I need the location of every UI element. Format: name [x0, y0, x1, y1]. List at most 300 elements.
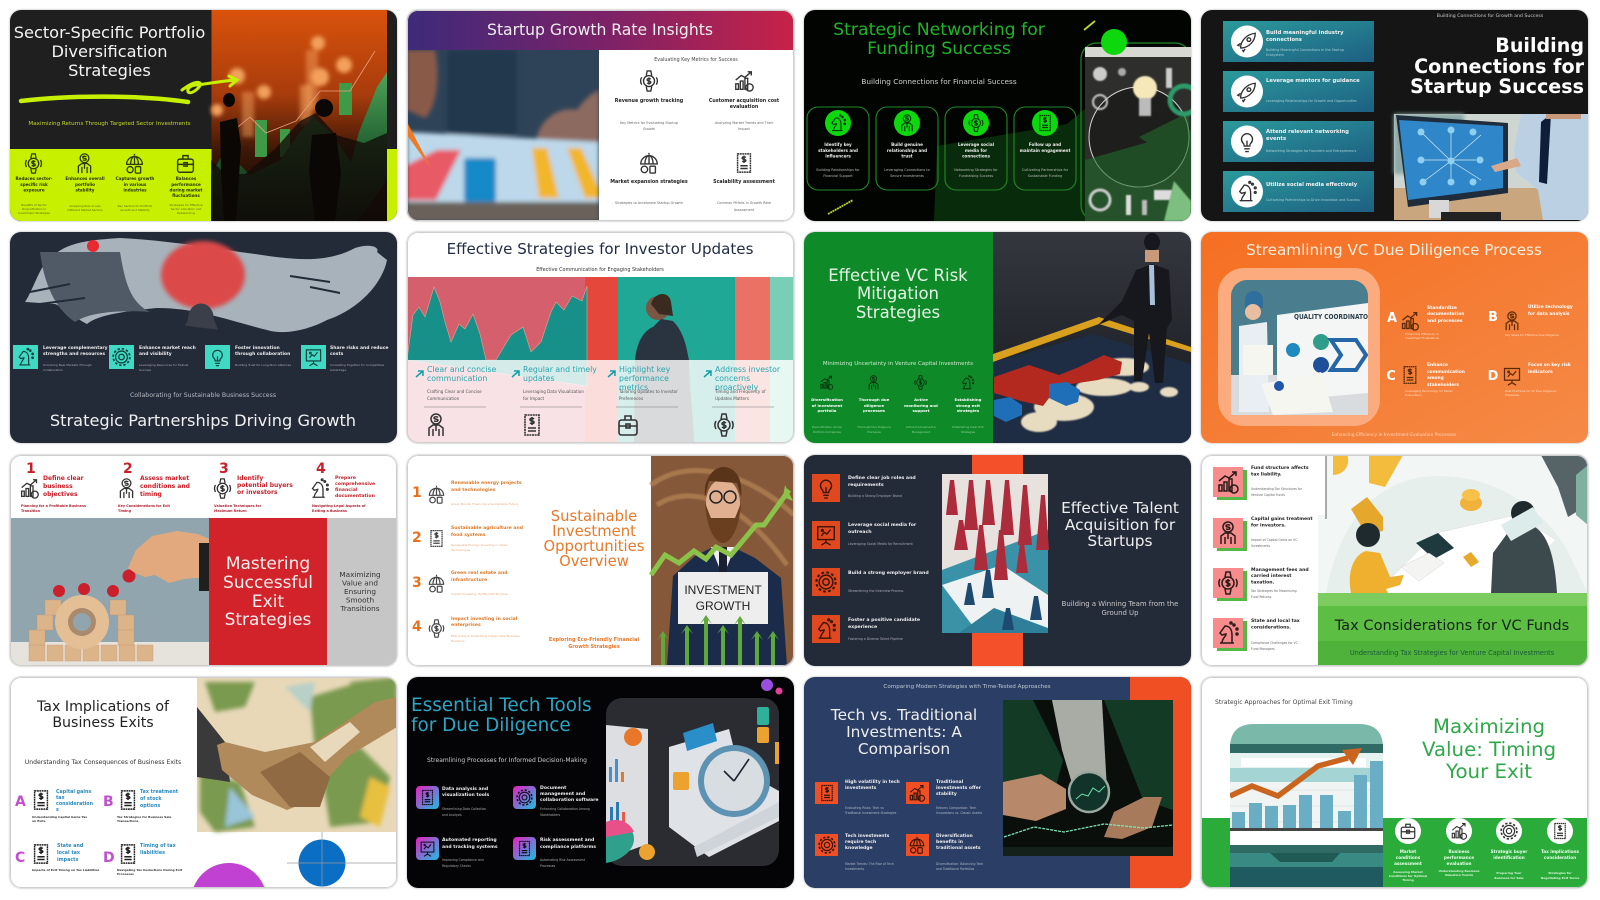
title	[830, 706, 977, 758]
list: four comparison points	[815, 779, 983, 871]
cards: four networking steps: Secure Investments	[890, 174, 924, 178]
list: four tax items	[15, 789, 183, 876]
list: four comparison points: High volatility in tech	[845, 779, 900, 785]
list: four comparison points: Market Trends: The Rise of Tech	[845, 862, 894, 866]
list: four tax points: Management fees and	[1251, 567, 1309, 573]
title: Startup Success	[1410, 75, 1584, 98]
item A	[1387, 305, 1464, 340]
green band	[1201, 818, 1588, 888]
list: four tax points: Fund Managers	[1251, 647, 1275, 651]
overlay with four tips: communication	[427, 374, 487, 383]
photo: hand placing pin on wooden blocks	[10, 518, 209, 666]
list: four tax items: impacts	[57, 857, 78, 863]
overlay with four tips	[407, 360, 794, 443]
list: four tax items: Tax Strategies for Business Sale	[117, 815, 171, 819]
title	[828, 266, 968, 322]
list: four comparison points: require tech	[845, 839, 876, 845]
list: four mitigations: Active	[914, 397, 928, 402]
list: four partnership benefits: Collaboration	[43, 368, 63, 372]
list: four partnership benefits: Foster innovation	[235, 345, 280, 351]
list: four comparison points: traditional assets	[936, 845, 981, 851]
metric grid	[610, 71, 780, 212]
list: four tax points: for investors.	[1251, 522, 1286, 528]
image: brushed banner with red glow	[25, 238, 387, 344]
list: four tax items: tax	[56, 795, 66, 801]
list: four connection tips: Leveraging Relationships for Growth and Opportunities	[1266, 99, 1357, 103]
list: four mitigations: of investment	[812, 403, 842, 408]
metric grid: Market expansion strategies	[610, 179, 688, 185]
item A: A	[1387, 311, 1397, 326]
list: four tax items: s	[56, 808, 59, 813]
list: four opportunities: ESG Criteria: Evaluating Sustainable Business	[451, 634, 520, 638]
list: four tools: Streamlining Data Collection	[442, 807, 486, 811]
photo: bearded man with investment growth sign: INVESTMENT	[684, 583, 762, 597]
list: four comparison points: knowledge	[845, 845, 873, 851]
list: four tax items: Timing of tax	[140, 843, 177, 849]
list: four mitigations: strong exit	[956, 403, 980, 408]
list: four benefits: Growth and Stability	[120, 208, 150, 212]
cards: four networking steps: Leveraging Connections to	[884, 168, 930, 172]
list: four tax items: Understanding Capital Gains Tax	[32, 815, 87, 819]
subtitle: Collaborating for Sustainable Business Success	[130, 392, 276, 399]
title: Building	[1495, 34, 1584, 57]
steps row: Assess market	[140, 475, 189, 482]
list: four partnership benefits: Success	[139, 368, 152, 372]
list: four benefits: performance	[171, 182, 201, 187]
title: Funding Success	[867, 39, 1011, 59]
list: four opportunities: infrastructure	[451, 577, 487, 583]
panel: Effective Strategies for Investor Updates	[407, 232, 794, 443]
list: four tools: Stakeholders	[540, 813, 561, 817]
list: four benefits: portfolio	[75, 182, 95, 187]
item C: Enhance	[1427, 362, 1448, 368]
list: four opportunities: Renewable energy projects	[451, 480, 522, 486]
list: four exit factors: conditions	[1396, 855, 1421, 860]
list: four benefits: Rebalancing	[177, 211, 195, 215]
subtitle: Exploring Eco-Friendly Financial	[549, 637, 639, 643]
title: Startups	[1087, 532, 1153, 550]
list: four tax items: on Exits	[32, 819, 46, 823]
overlay with four tips: Updates Matters	[715, 396, 749, 401]
list: four connection tips: Leverage mentors for guidance	[1266, 78, 1360, 84]
title	[1061, 499, 1179, 550]
list: four partnership benefits: and visibility	[139, 351, 172, 357]
list: four opportunities: 3	[412, 575, 422, 591]
title: Maximizing	[1433, 715, 1545, 738]
list: four mitigations: strategies	[957, 408, 980, 413]
steps row: comprehensive	[335, 481, 375, 487]
panel: Tax Considerations for VC Funds	[1201, 455, 1588, 666]
list: four tax items: of stock	[140, 796, 162, 802]
list: four opportunities: 4	[412, 619, 422, 635]
list: four talent steps: experience	[848, 624, 877, 630]
metric grid: Common Pitfalls in Growth Rate	[717, 201, 771, 205]
list: four tax points: Impact of Capital Gains on VC	[1251, 538, 1297, 542]
list: four tools: Processes	[540, 864, 556, 868]
list: four partnership benefits: Share risks and reduce	[330, 345, 388, 351]
metric grid: Strategies to Accelerate Startup Growth	[615, 201, 683, 205]
photo: man pointing at network diagram monitor	[1394, 114, 1588, 220]
overlay with four tips: proactively	[715, 383, 759, 392]
list: four talent steps: Leveraging Social Media for Recruitment	[848, 542, 914, 546]
list: four connection tips: Build meaningful industry	[1266, 30, 1344, 36]
list: four benefits: Investment Strategies	[18, 211, 51, 215]
list: four tools: collaboration software	[540, 797, 599, 803]
steps row: objectives	[43, 491, 78, 498]
list: four talent steps: Fostering a Diverse Talent Pipeline	[848, 637, 903, 641]
list: four benefits	[16, 154, 203, 215]
image: clock, report and calendar	[606, 698, 779, 866]
list: four exit factors: Understanding Business	[1438, 869, 1480, 873]
title	[36, 699, 170, 731]
list: four tools: Risk assessment and	[540, 837, 594, 843]
steps row: conditions and	[140, 483, 190, 490]
list: four mitigations: Diversification	[811, 397, 843, 402]
list: four connection tips: events	[1266, 136, 1286, 142]
list: four mitigations: portfolio	[818, 408, 837, 413]
metric grid: Analyzing Market Trends and Their	[715, 121, 774, 125]
list: four benefits: Analyzing Risk Across	[69, 204, 101, 208]
overlay with four tips: Communication	[427, 396, 460, 401]
cards: four networking steps: maintain engagement	[1020, 148, 1070, 153]
orange accent bar	[1130, 677, 1191, 888]
subtitle: Minimizing Uncertainty in Venture Capital Investments	[823, 361, 973, 367]
list: four connection tips: Cultivating Partnerships to Drive Innovation and Success	[1266, 198, 1360, 202]
subtitle: Effective Communication for Engaging Stakeholders	[536, 267, 664, 273]
title band	[1318, 593, 1588, 666]
list: four tools: Automating Risk Assessment	[540, 858, 586, 862]
list: four connection tips: Ecosystem	[1266, 53, 1284, 57]
list: four tax items: liabilities	[140, 850, 165, 856]
title: Streamlining VC Due Diligence Process	[1246, 241, 1542, 259]
list: four mitigations: Active Involvement in	[906, 425, 936, 429]
list: four tax items: Navigating Tax Deductions During Exit	[117, 868, 183, 872]
list: four talent steps: requirements	[848, 482, 884, 488]
cards: four networking steps: stakeholders and	[818, 148, 858, 153]
title: Effective Talent	[1061, 499, 1179, 517]
steps row: 3	[219, 461, 229, 477]
title band: Tax Considerations for VC Funds	[1334, 617, 1569, 634]
photo: hand with pen over bar chart	[407, 50, 599, 221]
list: four tax points: Understanding Tax Structures for	[1251, 487, 1303, 491]
title block: Strategies	[225, 610, 312, 630]
list: four opportunities: food systems	[451, 532, 486, 538]
list: four tax items: D	[103, 850, 115, 866]
subtitle block: Value and	[342, 578, 378, 588]
list: four talent steps: outreach	[848, 529, 872, 535]
icon: dots	[761, 679, 782, 694]
list: four tax points: Fund Returns	[1251, 595, 1272, 599]
panel: Mastering Successful Exit Strategies	[10, 455, 397, 666]
list: four partnership benefits: Leverage complementary	[43, 345, 108, 351]
list: four comparison points: Tech investments	[845, 833, 890, 839]
list: four tax points: carried interest	[1251, 573, 1292, 579]
panel: Tech vs. Traditional Investments: A Comparison	[804, 677, 1191, 888]
overlay with four tips: Leveraging Data Visualization	[523, 389, 584, 394]
list: four mitigations	[811, 376, 985, 434]
list: four connection tips: Attend relevant networking	[1266, 129, 1349, 135]
item A: documentation	[1427, 311, 1464, 317]
metric grid: evaluation	[730, 104, 759, 110]
list: four mitigations: diligence	[864, 403, 884, 408]
item C: Leveraging Technology for Faster	[1405, 389, 1454, 393]
list: four opportunities: Impact Investing: Profits with Purpose	[451, 592, 508, 596]
metric grid: Key Metrics for Evaluating Startup	[620, 121, 678, 125]
title	[411, 695, 592, 736]
list: four tax items: Capital gains	[56, 789, 91, 795]
list: four exit factors: Business	[1449, 849, 1470, 854]
photo: bearded man with investment growth sign: GROWTH	[696, 599, 750, 613]
list: four benefits: Strategies for Effective	[169, 203, 203, 207]
panel: Building Connections for Startup Success	[1201, 10, 1588, 221]
steps row: 1	[26, 461, 36, 477]
list: four partnership benefits: Building Trust for Long-Term Alliances	[235, 363, 292, 367]
title: Sector-Specific Portfolio	[14, 23, 205, 42]
list: four partnership benefits	[13, 345, 388, 372]
steps row: Exiting a Business	[312, 509, 347, 513]
cards: four networking steps: media for	[965, 148, 987, 153]
list: four benefits: Key Sectors for Portfolio	[118, 204, 153, 208]
list: four benefits: exposure	[23, 188, 45, 192]
list: four tax items: State and	[57, 843, 84, 849]
list: four partnership benefits: Advantage	[330, 368, 346, 372]
item B	[1488, 304, 1573, 337]
subtitle: Maximizing Returns Through Targeted Sector Investments	[28, 121, 191, 127]
item A: and processes	[1427, 318, 1463, 324]
subtitle: Understanding Tax Consequences of Business Exits	[25, 759, 181, 766]
photo: handshake over world map	[197, 677, 397, 832]
list: four tax points	[1213, 465, 1313, 651]
list: four mitigations: Establishing Clear Exit	[952, 425, 985, 429]
item B: B	[1488, 310, 1498, 325]
list: four tax items: B	[103, 794, 114, 810]
list: four comparison points: Investments	[845, 867, 865, 871]
title block: Mastering	[226, 554, 310, 574]
photo: bearded man with investment growth sign	[651, 455, 794, 666]
item C	[1386, 362, 1465, 397]
item D: indicators	[1528, 369, 1553, 375]
subtitle: Building a Winning Team from the	[1062, 600, 1178, 608]
subtitle: Building Connections for Financial Success	[861, 77, 1017, 86]
steps row: Maximum Return	[214, 509, 247, 513]
title: Value: Timing	[1422, 738, 1556, 761]
list: four exit factors: Assessing Market	[1393, 870, 1423, 874]
title: Sustainable	[551, 508, 637, 525]
list: four opportunities: Green Bonds: Financing a Sustainable Future	[451, 502, 518, 506]
metric grid: Assessment	[734, 208, 755, 212]
item B: Key Steps for Effective Due Diligence	[1505, 333, 1559, 337]
list: four opportunities: Practices	[451, 639, 465, 643]
footer text: Enhancing Efficiency in Investment Evaluation Processes	[1332, 432, 1457, 438]
cards: four networking steps: relationships and	[887, 148, 927, 153]
list: four comparison points: benefits in	[936, 839, 963, 845]
list: four talent steps	[812, 474, 929, 643]
list: four partnership benefits: Unlocking New Markets Through	[43, 363, 92, 367]
list: four comparison points: Evaluating Risks: Tech vs	[845, 806, 884, 810]
subtitle: Streamlining Processes for Informed Decision-Making	[427, 757, 587, 764]
steps row: 2	[123, 461, 133, 477]
cards: four networking steps: Cultivating Partnerships for	[1022, 168, 1069, 172]
list: four tax items: A	[15, 794, 26, 810]
steps row: timing	[140, 491, 162, 498]
title	[1422, 715, 1556, 783]
list: four exit factors: Strategic buyer	[1491, 849, 1528, 854]
subtitle	[1062, 600, 1178, 617]
list: four comparison points: investments	[845, 785, 877, 791]
list: four exit factors: Timing	[1402, 878, 1414, 882]
steps row: business	[43, 483, 73, 490]
list: four tools: Improving Compliance and	[442, 858, 484, 862]
list: four benefits: Diversification in	[22, 207, 46, 211]
list: four exit factors: Strategies for	[1548, 871, 1572, 875]
list: four mitigations: Thorough due	[859, 397, 890, 402]
cards: four networking steps: Follow up and	[1029, 142, 1061, 147]
list: four tools: management and	[540, 791, 585, 797]
list: four comparison points: investments offer	[936, 785, 982, 791]
list: four tools: Automated reporting	[442, 837, 497, 843]
cards: four networking steps: Networking Strategies for	[954, 168, 998, 172]
title band: Understanding Tax Strategies for Venture Capital Investments	[1350, 649, 1555, 657]
list: four benefits: industries	[123, 188, 147, 192]
list: four mitigations: monitoring and	[904, 403, 938, 408]
list: four exit factors: Business for Sale	[1494, 876, 1524, 880]
steps row: or investors	[237, 489, 278, 496]
list: four tax items: C	[15, 850, 25, 866]
overlay with four tips: metrics	[619, 383, 648, 392]
overlay with four tips: Clear and concise	[427, 365, 497, 374]
list: four opportunities: Technologies	[450, 548, 471, 552]
list: four tax points: Compliance Challenges for VC	[1251, 641, 1298, 645]
list: four partnership benefits: strengths and resources	[43, 351, 105, 357]
title: Mitigation	[857, 284, 939, 303]
list: four benefits: Different Market Sectors	[67, 208, 103, 212]
item C: C	[1386, 369, 1396, 384]
subtitle: Strategic Approaches for Optimal Exit Timing	[1215, 699, 1353, 706]
list: four benefits: during market	[170, 188, 203, 192]
list: four exit factors: Preparing Your	[1496, 871, 1522, 875]
list: four tools: Data analysis and	[442, 786, 488, 792]
panel: Effective VC Risk Mitigation Strategies	[804, 232, 1191, 443]
list: four partnership benefits: through collaboration	[235, 351, 290, 357]
list: four opportunities: and technologies	[451, 487, 496, 493]
metric grid: Scalability assessment	[713, 179, 776, 185]
list: four connection tips: Networking Strategies for Founders and Entrepreneurs	[1266, 149, 1357, 153]
list: four partnership benefits: costs	[330, 351, 344, 357]
cards: four networking steps: Building Relationships for	[816, 168, 860, 172]
photo: businessman with yellow barrier and red blocks	[993, 232, 1191, 443]
title: Strategies	[856, 303, 940, 322]
overlay with four tips: updates	[523, 374, 555, 383]
list: four comparison points: Returns Comparison: Tech	[936, 806, 976, 810]
title: Investments: A	[846, 723, 962, 741]
cards: four networking steps: Identify key	[824, 142, 852, 147]
title: Business Exits	[52, 715, 154, 731]
subtitle: Building Connections for Growth and Success	[1437, 13, 1544, 19]
steps row: Identify	[237, 475, 263, 482]
list: four tax points: considerations.	[1251, 624, 1291, 630]
subtitle: Evaluating Key Metrics for Success	[654, 57, 738, 63]
panel: Strategic Networking for Funding Success	[804, 10, 1191, 221]
list: four tax points: tax liability.	[1251, 472, 1282, 478]
photo frame: quality coordinator certificate	[1218, 268, 1380, 426]
list: four mitigations: support	[912, 408, 930, 413]
list: four mitigations: Processes	[867, 430, 881, 434]
overlay with four tips: Regular and timely	[523, 365, 597, 374]
cards: four networking steps: Leverage social	[958, 142, 995, 147]
list: four opportunities: Renewable Energy: Investing in Clean	[451, 543, 508, 547]
list: four exit factors: Conditions for Optimal	[1389, 874, 1427, 878]
metric grid: Growth	[643, 127, 655, 131]
title: Effective VC Risk	[828, 266, 968, 285]
steps row: potential buyers	[237, 482, 293, 489]
title: Acquisition for	[1065, 516, 1176, 534]
panel: Streamlining VC Due Diligence Process	[1201, 232, 1588, 443]
cards: four networking steps	[807, 107, 1076, 190]
list: four opportunities: Impact investing in social	[451, 616, 518, 622]
list: four tools: and tracking systems	[442, 844, 498, 850]
list: four tax points: Capital gains treatment	[1251, 516, 1313, 522]
list: four talent steps: Leverage social media for	[848, 522, 917, 528]
title: Tech vs. Traditional	[830, 706, 977, 724]
list: four benefits: in various	[124, 182, 147, 187]
list: four exit factors: Tax implications	[1541, 849, 1580, 854]
list: four tax points: State and local tax	[1251, 618, 1300, 624]
list: four talent steps: Define clear job roles and	[848, 475, 916, 481]
list: four opportunities: 2	[412, 530, 422, 546]
photo: light bulb and gears on dark board	[934, 29, 1198, 221]
panel: Startup Growth Rate Insights	[407, 10, 794, 221]
title: Comparison	[858, 740, 950, 758]
list: four mitigations: Diversification Across	[812, 425, 843, 429]
overlay with four tips: Preferences	[619, 396, 643, 401]
item A: Investment Evaluations	[1405, 336, 1440, 340]
subtitle block: Transitions	[339, 604, 380, 613]
steps row: Define clear	[43, 475, 84, 482]
item A: Standardize	[1427, 305, 1457, 311]
subtitle: Comparing Modern Strategies with Time-Tested Approaches	[883, 684, 1051, 690]
panel: Sector-Specific Portfolio Diversification Strategies	[10, 10, 397, 221]
panel: Essential Tech Tools for Due Diligence	[407, 677, 794, 888]
panel: Tax Implications of Business Exits	[10, 677, 397, 888]
title: Connections for	[1414, 55, 1585, 78]
list: four benefits: specific risk	[20, 182, 48, 187]
list: four tax points: Fund structure affects	[1251, 465, 1309, 471]
steps row: documentation	[335, 493, 375, 499]
list: four comparison points: Traditional Investment Strategies	[844, 811, 897, 815]
panel: Strategic Partnerships Driving Growth	[10, 232, 397, 443]
title: for Due Diligence	[411, 715, 571, 736]
title: Tax Implications of	[36, 699, 170, 715]
cards: four networking steps: Build genuine	[891, 142, 923, 147]
metric grid: Revenue growth tracking	[615, 98, 684, 104]
steps row: Key Considerations for Exit	[118, 504, 170, 508]
list: four tax items: Transactions	[117, 819, 139, 823]
list: four tax points: Venture Capital Funds	[1251, 493, 1285, 497]
subtitle block	[327, 518, 397, 666]
list: four comparison points: Diversification: Balancing Tech	[936, 862, 983, 866]
item C: stakeholders	[1427, 382, 1459, 388]
panel: Effective Talent Acquisition for Startups	[804, 455, 1191, 666]
cards: four networking steps: Fundraising Success	[959, 174, 993, 178]
item B: Utilize technology	[1528, 304, 1573, 310]
overlay with four tips: performance	[619, 374, 669, 383]
list: four opportunities: Sustainable agriculture and	[451, 525, 523, 531]
list: four exit factors: Negotiating Exit Terms	[1541, 876, 1580, 880]
title: Overview	[559, 553, 629, 570]
overlay with four tips: for Impact	[523, 396, 544, 401]
list: four exit factors	[1389, 818, 1580, 882]
title block: Exit	[252, 592, 284, 612]
